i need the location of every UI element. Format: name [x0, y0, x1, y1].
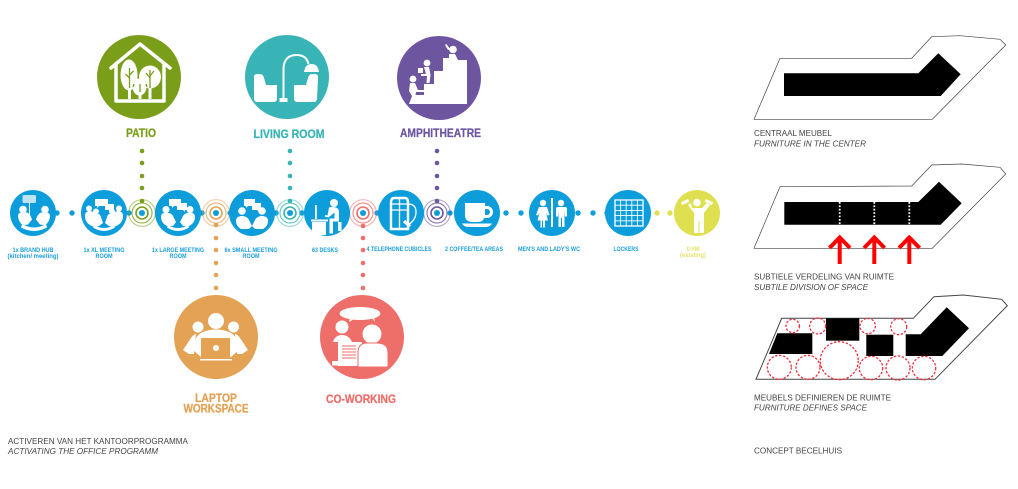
caption: activating the office: ACTIVEREN VAN HET KANTOORPROGRAMMA [8, 436, 188, 446]
caption: furniture in the center: CENTRAAL MEUBEL [754, 128, 832, 138]
target: laptop workspace node with dotted line [203, 200, 229, 290]
icon: lockers grid [605, 190, 651, 236]
caption: furniture defines space [754, 393, 891, 413]
labels: programme items: ROOM [96, 254, 112, 260]
icon: desks [304, 190, 350, 236]
diagram: furniture in the center [754, 36, 1006, 119]
icon: XL meeting room [81, 190, 127, 236]
target: living room node with dotted line [277, 149, 303, 226]
caption: subtile division of space: SUBTIELE VERDELING VAN RUIMTE [754, 271, 894, 281]
diagram: subtile division of space [754, 164, 1006, 264]
labels: programme items: 6x SMALL MEETING [224, 248, 278, 254]
icon: coffee cup [454, 190, 500, 236]
icon: brand hub [10, 190, 56, 236]
heading: co-working: CO-WORKING [326, 394, 396, 406]
caption: furniture in the center [754, 128, 866, 149]
labels: programme items: GYM [686, 247, 700, 253]
caption: activating the office [7, 436, 188, 456]
heading: laptop workspace: WORKSPACE [184, 404, 249, 416]
labels: programme items: 4 TELEPHONE CUBICLES [366, 247, 432, 253]
arrows: red division markers [830, 237, 920, 264]
caption: subtile division of space [754, 271, 894, 292]
labels: programme items: ROOM [242, 254, 260, 260]
target: amphitheatre node with dotted line [424, 149, 450, 226]
timeline connector dots [54, 210, 673, 216]
caption: activating the office: ACTIVATING THE OFFICE PROGRAMM [7, 446, 159, 456]
labels: programme items: 1x XL MEETING [84, 248, 125, 254]
labels: programme items: (existing) [680, 253, 706, 259]
labels: programme items: 2 COFFEE/TEA AREAS [445, 247, 503, 253]
heading: laptop workspace: LAPTOP [195, 393, 237, 405]
icon: living room [245, 35, 329, 119]
icon: men and lady WC [529, 190, 575, 236]
diagram: furniture defines space [756, 295, 1007, 380]
caption: concept becelhuis: CONCEPT BECELHUIS [754, 445, 842, 455]
icon: gym [674, 190, 720, 236]
labels: programme items: (kitchen/ meeting) [8, 254, 58, 260]
caption: subtile division of space: SUBTILE DIVISION OF SPACE [754, 282, 868, 292]
heading: laptop workspace [184, 393, 249, 416]
labels: programme items: 1x BRAND HUB [12, 248, 54, 254]
icon: large meeting room [155, 190, 201, 236]
icon: patio [97, 35, 181, 119]
labels: programme items: ROOM [170, 254, 186, 260]
caption: furniture in the center: FURNITURE IN THE CENTER [754, 139, 866, 149]
labels: programme items: MEN'S AND LADY'S WC [518, 247, 581, 253]
icon: amphitheatre [397, 36, 481, 120]
heading: patio: PATIO [126, 128, 156, 140]
labels: programme items: 63 DESKS [312, 248, 338, 254]
icon: telephone cubicles [378, 190, 424, 236]
labels: programme items: 1x LARGE MEETING [152, 248, 204, 254]
icon: co-working [320, 295, 404, 379]
caption: furniture defines space: MEUBELS DEFINIEREN DE RUIMTE [754, 393, 891, 403]
heading: living room: LIVING ROOM [254, 129, 324, 141]
caption: furniture defines space: FURNITURE DEFINES SPACE [754, 403, 867, 413]
labels: programme items: LOCKERS [614, 247, 638, 253]
icon: laptop workspace [174, 295, 258, 379]
labels: programme items [8, 247, 706, 260]
target: co-working node with dotted line [350, 200, 376, 290]
target: patio node with dotted line [129, 149, 155, 226]
heading: amphitheatre: AMPHITHEATRE [400, 128, 481, 140]
icon: small meeting room [229, 190, 275, 236]
